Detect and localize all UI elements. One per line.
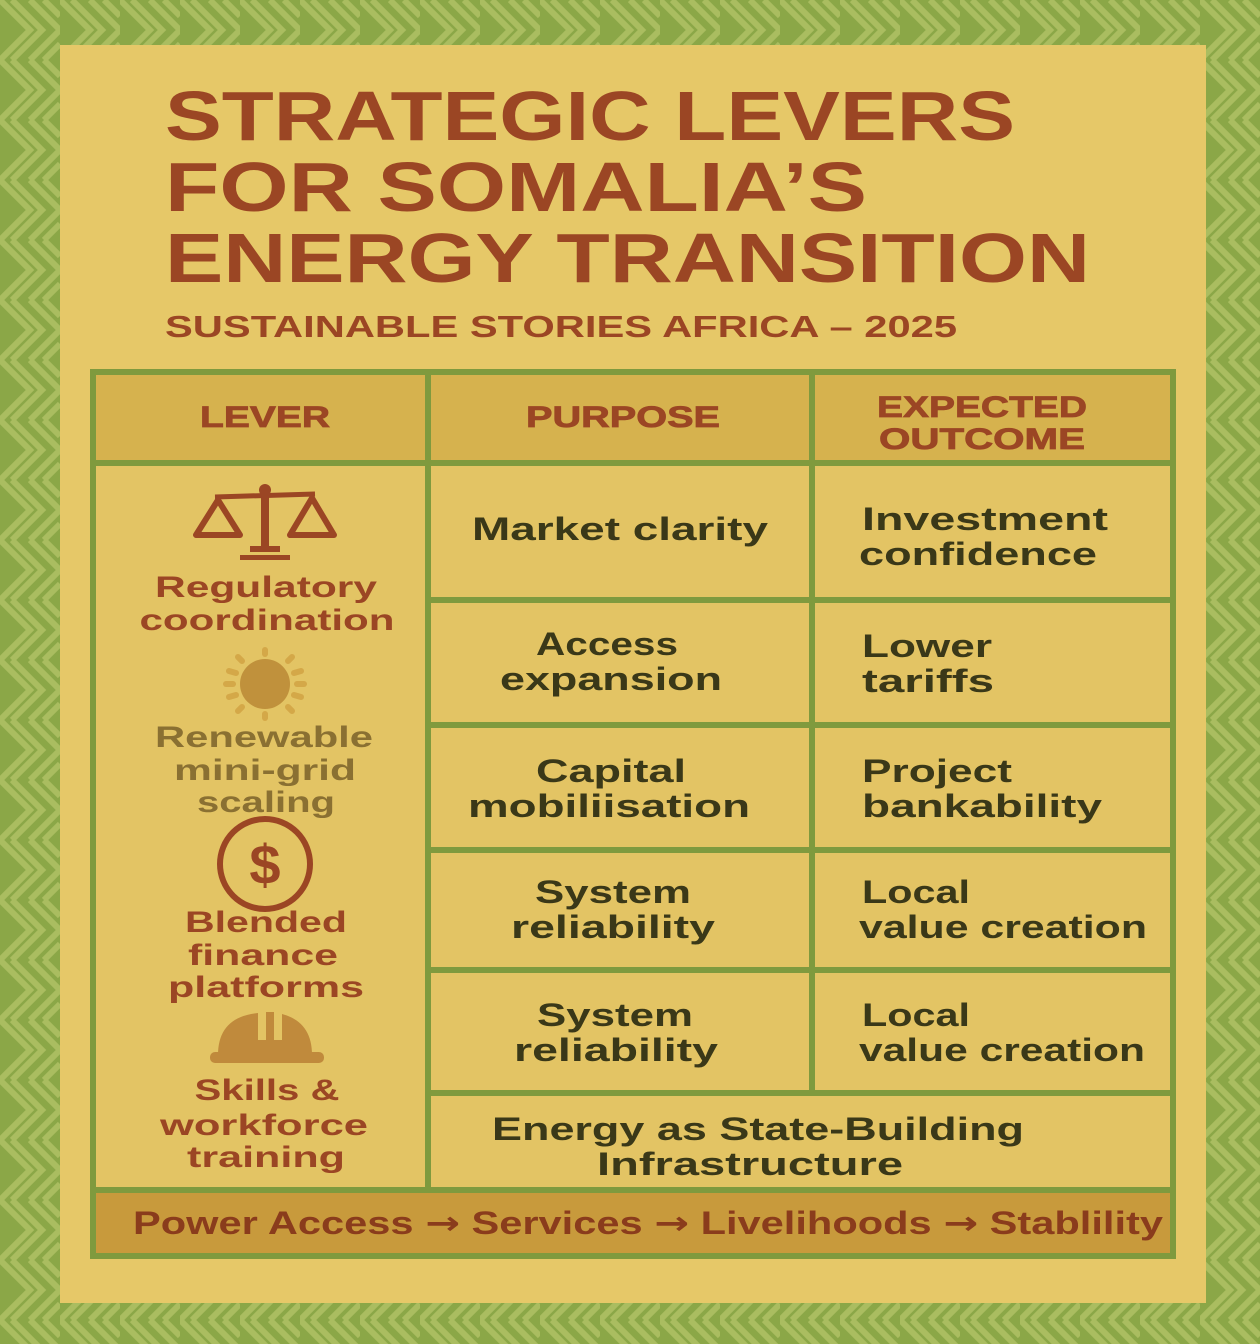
outcome column: Lower xyxy=(862,628,992,664)
icon: dollar coin: $ xyxy=(249,833,281,896)
table header row: PURPOSE xyxy=(526,401,720,434)
lever label: renewable xyxy=(155,721,373,819)
table header row: EXPECTED xyxy=(877,391,1087,424)
merged row: state-building: Energy as State-Building xyxy=(492,1111,1024,1147)
lever label: skills: training xyxy=(187,1141,345,1174)
purpose column: System xyxy=(535,874,691,910)
icon: dollar coin xyxy=(220,819,310,909)
lever label: skills: workforce xyxy=(159,1109,368,1142)
outcome column: Investment xyxy=(862,501,1109,537)
table header row: OUTCOME xyxy=(879,423,1085,456)
purpose column: reliability xyxy=(514,1032,718,1068)
table header row: LEVER xyxy=(200,401,330,434)
title: ENERGY TRANSITION xyxy=(165,219,1090,297)
outcome column: bankability xyxy=(862,788,1102,824)
lever label: skills xyxy=(159,1074,368,1174)
lever label: blended finance: Blended xyxy=(185,906,347,939)
purpose column: System xyxy=(537,997,693,1033)
footer band xyxy=(93,1190,1173,1256)
purpose column xyxy=(468,511,768,1068)
title xyxy=(165,77,1090,297)
title: STRATEGIC LEVERS xyxy=(165,77,1015,155)
title: FOR SOMALIA’S xyxy=(165,148,867,226)
outcome column: Local xyxy=(862,874,970,910)
icon: sun xyxy=(226,650,304,718)
lever label: renewable: scaling xyxy=(197,786,335,819)
outcome column: confidence xyxy=(859,536,1097,572)
lever label: regulatory xyxy=(140,571,394,637)
lever label: regulatory: Regulatory xyxy=(155,571,377,604)
merged row: state-building: Infrastructure xyxy=(597,1146,903,1182)
outcome column: tariffs xyxy=(862,663,994,699)
purpose column: Access xyxy=(536,626,678,662)
lever label: skills: Skills & xyxy=(194,1074,340,1107)
lever label: renewable: mini-grid xyxy=(174,754,356,787)
merged row: state-building xyxy=(492,1111,1024,1182)
lever column xyxy=(140,484,394,1174)
subtitle: SUSTAINABLE STORIES AFRICA – 2025 xyxy=(165,309,957,344)
lever label: renewable: Renewable xyxy=(155,721,373,754)
icon: scales xyxy=(196,484,334,560)
outcome column: Project xyxy=(862,753,1012,789)
purpose column: reliability xyxy=(511,909,715,945)
lever label: blended finance: finance xyxy=(188,939,338,972)
outcome column: value creation xyxy=(859,909,1147,945)
outcome column: value creation xyxy=(859,1032,1145,1068)
lever label: regulatory: coordination xyxy=(140,604,394,637)
purpose column: mobiliisation xyxy=(468,788,750,824)
purpose column: Capital xyxy=(536,753,686,789)
purpose column: expansion xyxy=(500,661,722,697)
outcome column: Local xyxy=(862,997,970,1033)
footer band: Power Access → Services → Livelihoods → Stablility xyxy=(133,1204,1163,1242)
table header row xyxy=(93,372,1173,463)
table xyxy=(93,372,1173,1256)
table background xyxy=(93,372,1173,1256)
lever label: blended finance: platforms xyxy=(168,971,364,1004)
outcome column xyxy=(859,501,1147,1068)
lever label: blended finance xyxy=(168,906,364,1004)
purpose column: Market clarity xyxy=(472,511,768,547)
icon: hard hat xyxy=(210,1012,324,1063)
